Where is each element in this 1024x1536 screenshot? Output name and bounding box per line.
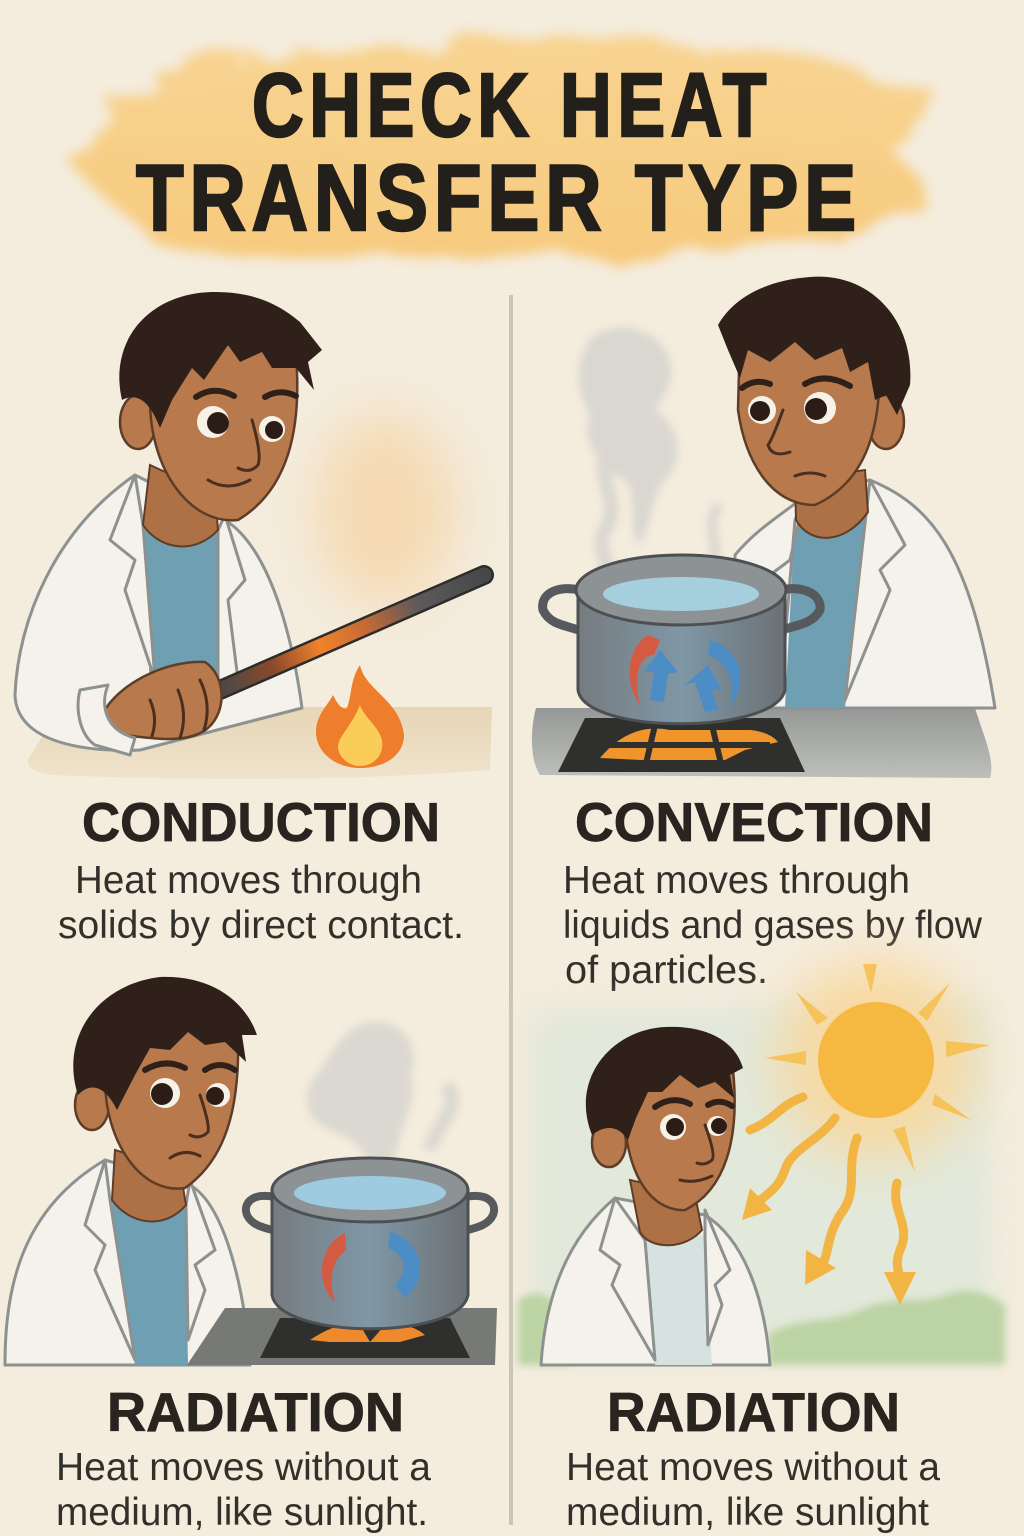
- hand: [103, 662, 222, 739]
- text: conduction description: Heat moves through: [75, 859, 422, 902]
- icon: blue convection arrows: [644, 640, 740, 712]
- stove counter: [187, 1308, 497, 1365]
- heading: radiation: RADIATION: [607, 1381, 900, 1443]
- panel: radiation with pot: [5, 977, 497, 1534]
- panel: convection: [532, 277, 995, 992]
- table: [28, 707, 492, 779]
- text: radiation description: [56, 1446, 431, 1534]
- icon: flame: [316, 665, 404, 768]
- steam: [579, 328, 720, 575]
- bushes: [518, 1291, 1005, 1365]
- icon: wavy heat arrows: [750, 1097, 904, 1290]
- coat cuff: [78, 685, 135, 755]
- icon: blue arrow: [388, 1232, 420, 1298]
- icon: sun: [742, 964, 990, 1305]
- title text: [136, 56, 862, 250]
- text: conduction description: [58, 859, 464, 947]
- pot: radiation: [246, 1158, 494, 1329]
- title text: TRANSFER TYPE: [136, 145, 862, 250]
- text: radiation description: [566, 1446, 940, 1534]
- icon: red convection arrow: [630, 635, 660, 705]
- text: radiation description: Heat moves without a: [56, 1446, 431, 1489]
- text: radiation description: medium, like sunlight: [566, 1491, 929, 1534]
- steam: [307, 1022, 452, 1160]
- heated metal rod: [220, 575, 484, 690]
- stove counter: [532, 708, 991, 778]
- center divider: [509, 295, 513, 1525]
- panel: radiation with sun: [518, 960, 1005, 1534]
- text: convection description: [563, 859, 983, 992]
- burner flames: [310, 1324, 425, 1342]
- heading: conduction: CONDUCTION: [82, 791, 440, 853]
- text: convection description: of particles.: [565, 949, 768, 992]
- text: convection description: Heat moves through: [563, 859, 910, 902]
- panel: conduction: [15, 292, 492, 947]
- text: convection description: liquids and gases by flow: [563, 904, 983, 947]
- sky: [530, 1000, 995, 1355]
- heading: convection: CONVECTION: [575, 791, 933, 853]
- heading: radiation: RADIATION: [107, 1381, 404, 1443]
- burner flames: [600, 729, 778, 760]
- title banner: [72, 40, 945, 262]
- burner: [260, 1318, 470, 1358]
- title text: CHECK HEAT: [252, 56, 772, 156]
- sun glow: [776, 960, 976, 1160]
- burner: [558, 718, 805, 772]
- text: conduction description: solids by direct contact.: [58, 904, 464, 947]
- icon: red arrow: [322, 1233, 346, 1302]
- text: radiation description: Heat moves without a: [566, 1446, 940, 1489]
- text: radiation description: medium, like sunlight.: [56, 1491, 428, 1534]
- scientist: radiation left: [5, 977, 257, 1365]
- scientist: convection: [718, 277, 995, 708]
- pot: convection: [543, 555, 820, 724]
- burner grate: [600, 725, 770, 768]
- scientist: radiation right: [541, 1027, 770, 1365]
- heat glow: [315, 415, 455, 605]
- scientist: conduction: [15, 292, 322, 750]
